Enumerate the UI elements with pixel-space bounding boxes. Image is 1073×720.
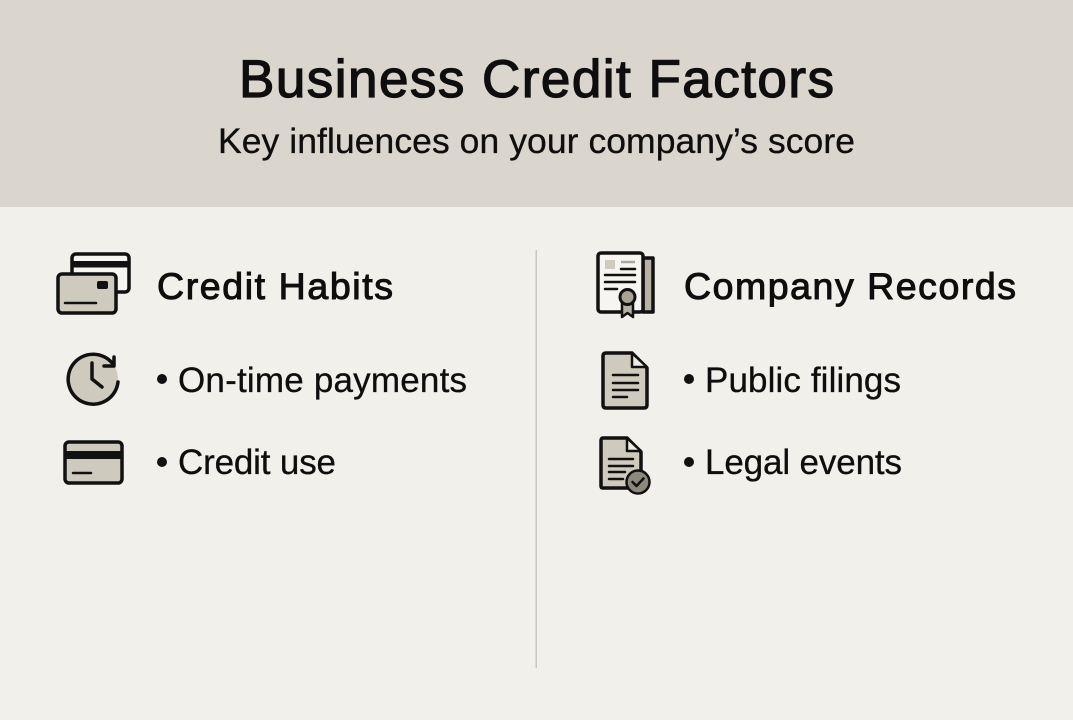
item: public filings: Public filings [705,361,901,400]
icon: credit card [65,442,122,483]
panel: company records [598,253,1016,494]
icon: clock [68,354,118,404]
item: on-time payments: On-time payments [178,361,467,400]
heading: company records: Company Records [684,265,1016,307]
icon: legal document with check [601,438,650,494]
header band [0,0,1073,207]
title: Business Credit Factors [239,50,834,109]
heading: credit habits: Credit Habits [157,265,393,307]
icon: certificate [598,253,653,317]
item: legal events: Legal events [705,443,902,482]
item: credit use: Credit use [178,443,336,482]
icon: credit cards [58,254,129,313]
panel: credit habits [58,254,467,483]
subtitle: Key influences on your company’s score [218,121,855,161]
icon: document [603,353,647,408]
